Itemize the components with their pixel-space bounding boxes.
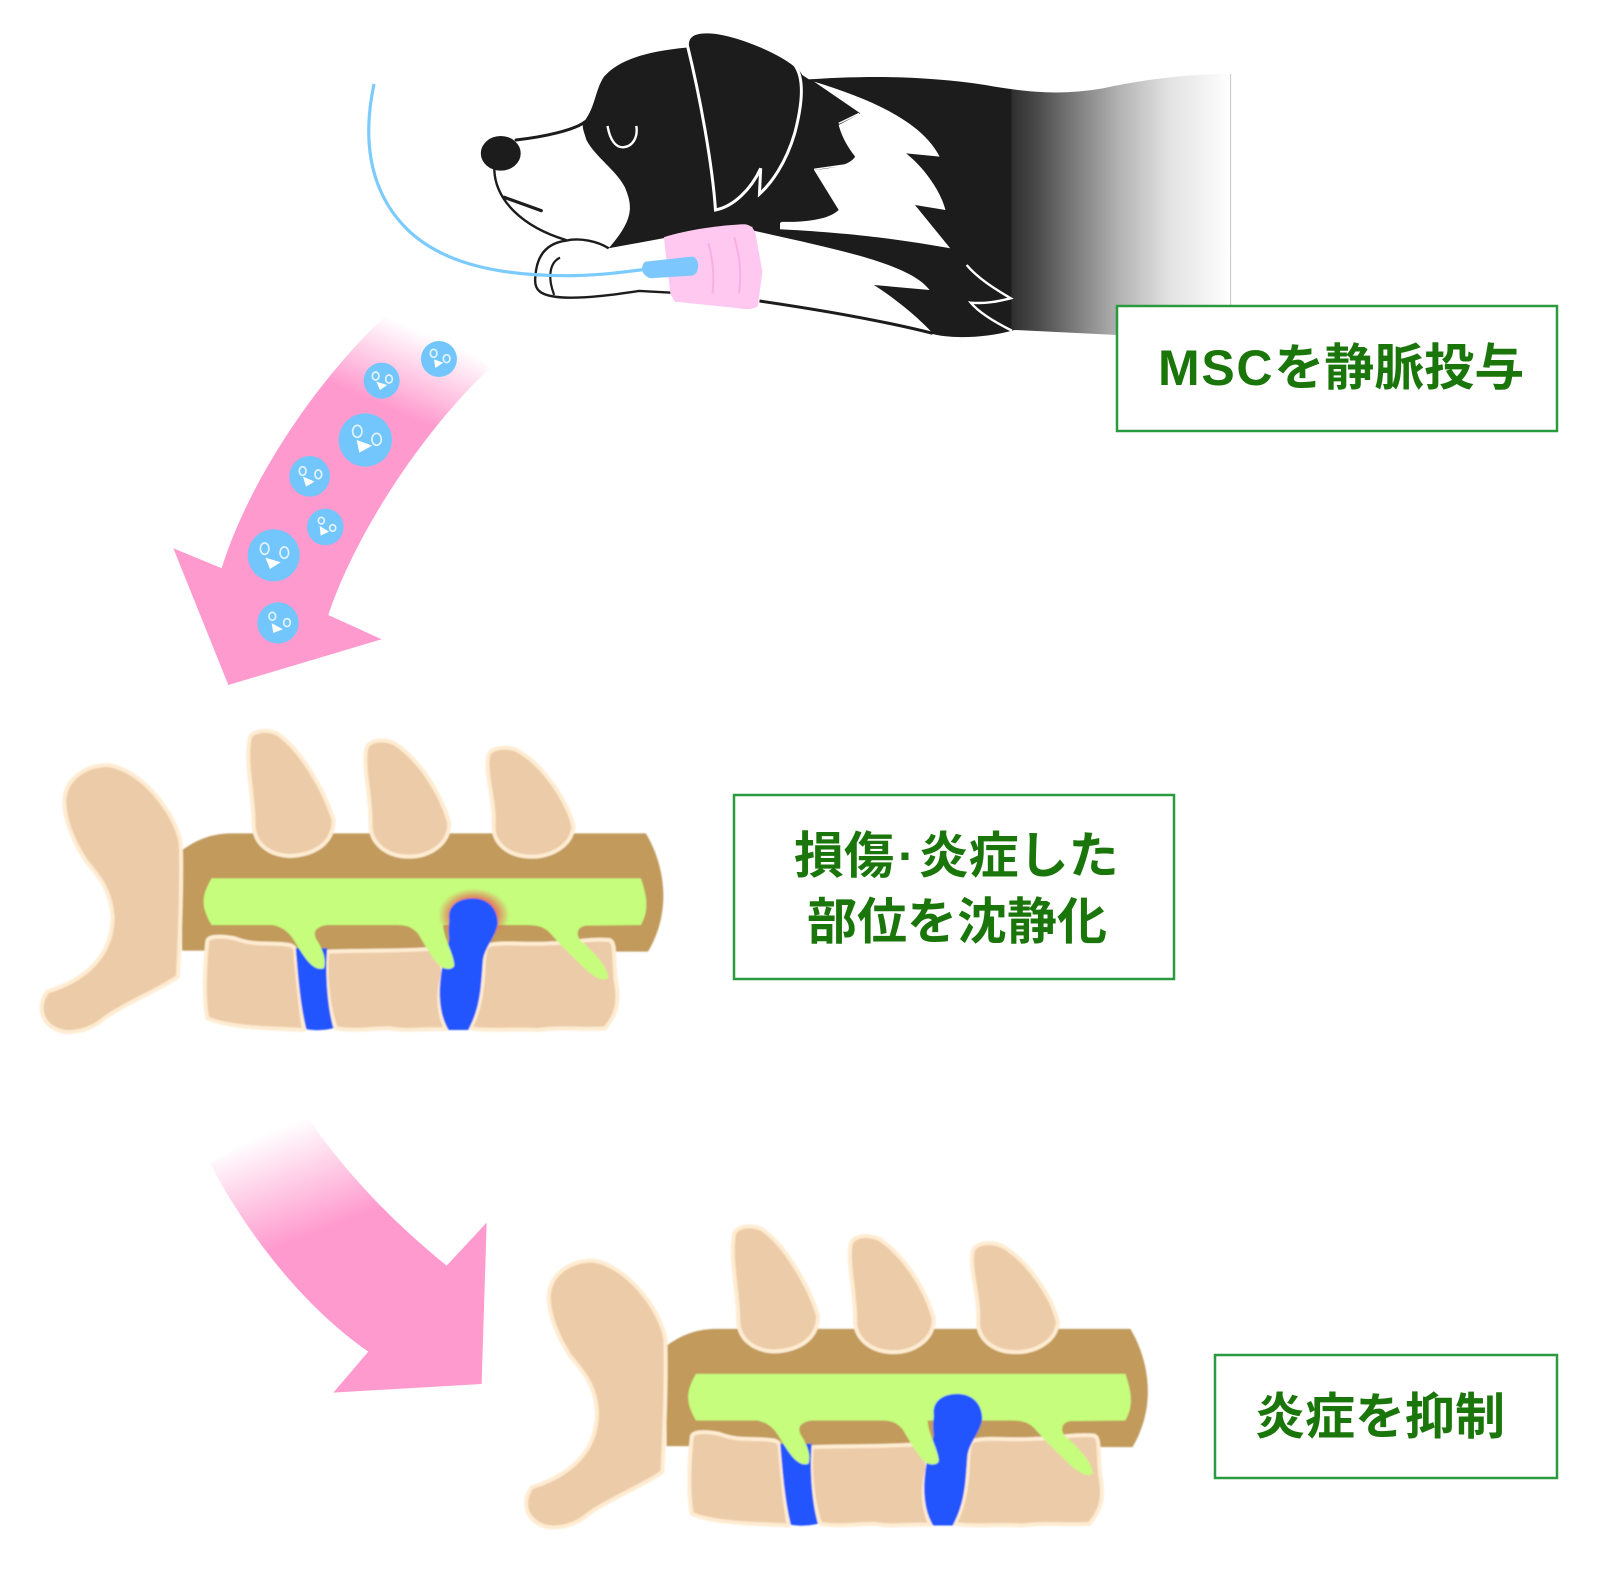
- pink curved arrow: [173, 297, 490, 685]
- cord nerve root over disc: [879, 1419, 939, 1464]
- label box: suppress inflammation: 炎症を抑制: [1255, 1389, 1505, 1445]
- MSC cell 7: [257, 602, 299, 644]
- pink bandage: [664, 224, 762, 309]
- intervertebral disc: [780, 1444, 818, 1526]
- spinous process 2: [850, 1236, 934, 1352]
- inflammation glow: [438, 888, 510, 942]
- cord nerve root over disc: [395, 924, 454, 969]
- MSC cell 1: [421, 341, 457, 377]
- white chest fur: [780, 82, 950, 248]
- fade edge line: [1230, 74, 1232, 307]
- label box: sedation of injured site: [734, 795, 1174, 979]
- MSC cell 5: [307, 509, 344, 545]
- dog body with gradient fade: [751, 74, 1231, 337]
- MSC cell 6: [248, 529, 300, 581]
- dog head and neck: [583, 32, 860, 248]
- curved pink arrow to recovered spine: [210, 1110, 487, 1393]
- white foreleg: [666, 230, 933, 333]
- spinous process 1: [248, 731, 334, 856]
- fur highlight lines: [781, 113, 1012, 331]
- spinous process 3: [972, 1243, 1058, 1352]
- paw toe line: [550, 258, 560, 295]
- spinous process 2: [365, 741, 449, 857]
- leg underside line: [759, 301, 933, 333]
- sacrum bone: [42, 765, 181, 1032]
- front paw: [535, 239, 671, 298]
- dog ear: [687, 32, 801, 210]
- label box: sedation of injured site: 損傷·炎症した: [794, 828, 1119, 884]
- muzzle lines: [494, 122, 585, 240]
- closed eye: [608, 126, 637, 147]
- MSC cell 2: [364, 363, 400, 399]
- paw outline: [535, 239, 671, 298]
- arrow with MSC cells: [173, 297, 490, 685]
- sacrum bone: [526, 1260, 666, 1527]
- spine diagram: inflammation suppressed: [526, 1226, 1148, 1527]
- spinous process 3: [488, 748, 573, 857]
- spinal canal: [182, 833, 663, 952]
- catheter: [642, 257, 698, 278]
- IV tube: [369, 84, 648, 276]
- herniated disc: [440, 898, 498, 1030]
- vertebral bodies: [689, 1432, 1102, 1525]
- spinal cord: [204, 878, 646, 980]
- dog illustration: [369, 32, 1231, 337]
- intervertebral disc: [296, 948, 334, 1030]
- label box: MSC administration: MSCを静脈投与: [1158, 340, 1524, 396]
- label box: sedation of injured site: 部位を沈静化: [807, 894, 1107, 950]
- spinal canal: [667, 1329, 1148, 1447]
- bandage folds: [708, 237, 740, 293]
- MSC cell 4: [289, 456, 330, 497]
- label box: MSC administration: [1117, 306, 1557, 431]
- label box: suppress inflammation: [1215, 1355, 1557, 1478]
- herniated disc: [924, 1394, 982, 1525]
- spine diagram: injured, inflamed: [42, 731, 663, 1032]
- vertebral bodies: [205, 937, 618, 1030]
- nose: [481, 136, 521, 171]
- spinous process 1: [733, 1226, 818, 1351]
- MSC cell 3: [339, 413, 392, 467]
- spinal cord: [688, 1374, 1131, 1475]
